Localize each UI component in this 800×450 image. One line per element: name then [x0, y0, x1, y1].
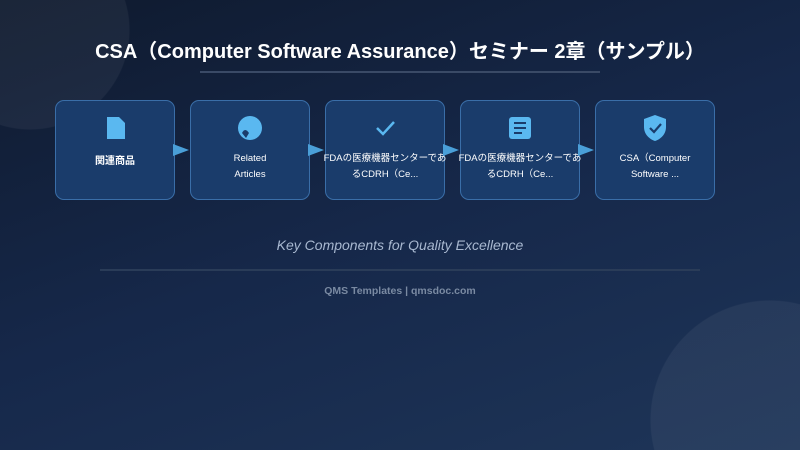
- icon: globe: [238, 116, 262, 140]
- text: 関連商品: [95, 156, 135, 167]
- icon: file: [107, 117, 125, 139]
- arrow: [578, 144, 594, 156]
- arrow: [173, 144, 189, 156]
- panel: FDA 2: [460, 100, 580, 200]
- panel: Related Articles: [190, 100, 310, 200]
- panel: 関連商品: [55, 100, 175, 200]
- icon: check: [376, 121, 395, 136]
- panel: CSA: [595, 100, 715, 200]
- text: FDAの医療機器センターであるCDRH（Ce...: [459, 153, 581, 180]
- text: Articles: [234, 169, 266, 180]
- text: FDAの医療機器センターであるCDRH（Ce...: [324, 153, 446, 180]
- subtitle: Key Components for Quality Excellence: [277, 237, 523, 253]
- icon: shield: [644, 115, 666, 141]
- footer: QMS Templates | qmsdoc.com: [324, 285, 476, 297]
- arrow: [443, 144, 459, 156]
- text: CSA（Computer: [620, 153, 690, 164]
- text: Related: [234, 153, 266, 164]
- text: [620, 152, 690, 180]
- icon: document: [509, 117, 531, 139]
- text: [234, 153, 266, 180]
- arrow: [308, 144, 324, 156]
- panel: FDA 1: [325, 100, 445, 200]
- text: Software ...: [631, 169, 679, 180]
- title: CSA（Computer Software Assurance）セミナー 2章（サンプル）: [95, 41, 705, 63]
